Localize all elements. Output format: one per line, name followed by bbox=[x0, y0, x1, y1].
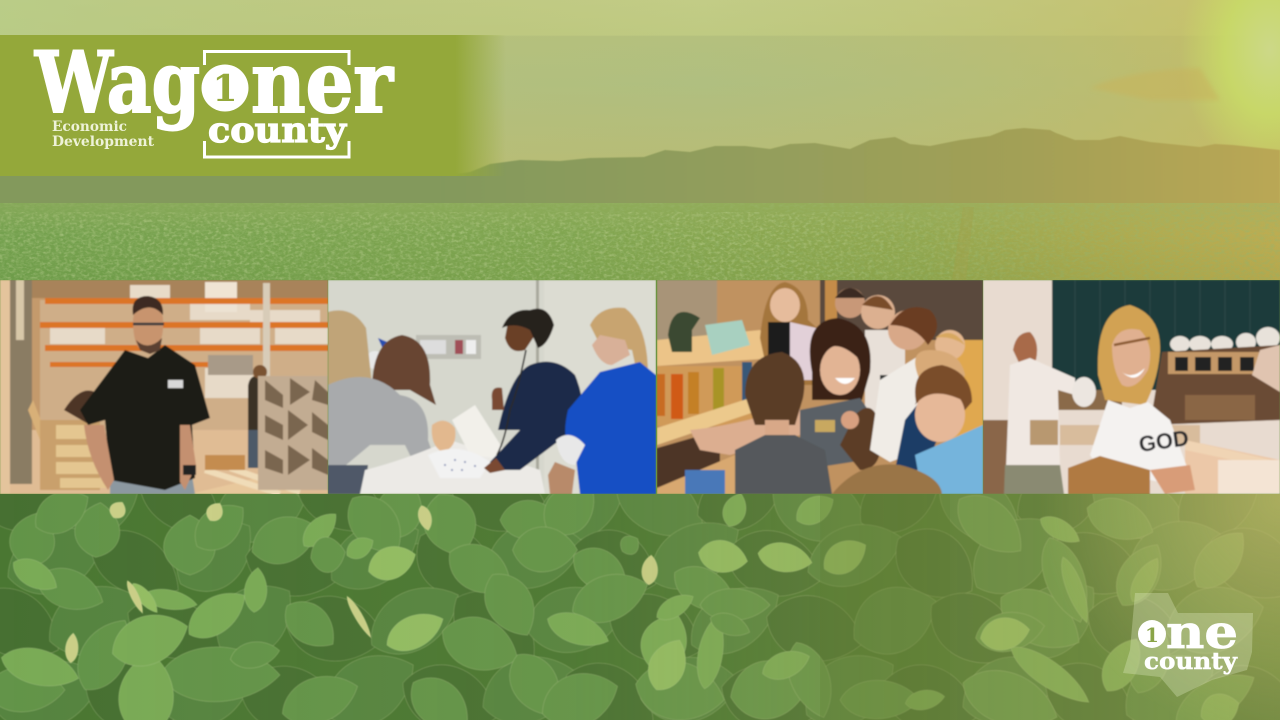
photo: worker in warehouse bbox=[0, 280, 328, 494]
logo: One County with state map bbox=[1123, 593, 1253, 697]
leaf cluster: dense canopy fill bbox=[0, 443, 1280, 720]
logo: Wagoner County Economic Development: Wag bbox=[34, 33, 200, 132]
background: farm field at sunrise bbox=[0, 0, 1280, 280]
photo: smiling woman in coffee shop bbox=[983, 280, 1280, 494]
logo: One County with state map: county bbox=[1144, 648, 1238, 675]
photo: teacher with children at classroom shelf bbox=[657, 280, 983, 494]
logo: Wagoner County Economic Development: county bbox=[208, 110, 348, 151]
panel: logo banner bbox=[0, 35, 506, 176]
logo: One County with state map: ne bbox=[1166, 605, 1238, 659]
leaf cluster: bright foreground leaves bbox=[0, 488, 1244, 720]
logo: One County with state map: 1 bbox=[1145, 623, 1159, 647]
logo: Wagoner County Economic Development: ner bbox=[251, 33, 395, 132]
photo: nursing students with patient mannequin bbox=[328, 280, 656, 494]
logo: Wagoner County Economic Development: Development bbox=[52, 134, 155, 150]
logo: Wagoner County Economic Development: 1 bbox=[212, 68, 238, 110]
background: soybean leaf close-up bbox=[0, 494, 1280, 720]
leaf cluster: mid layer bbox=[0, 473, 1263, 720]
map of Georgia bbox=[1123, 593, 1253, 697]
photo: smiling woman in coffee shop: GOD bbox=[1137, 425, 1190, 457]
logo: Wagoner County Economic Development: Economic bbox=[52, 119, 127, 135]
logo: Wagoner County Economic Development bbox=[34, 33, 395, 157]
warm light overlay on leaves bbox=[0, 494, 1280, 720]
